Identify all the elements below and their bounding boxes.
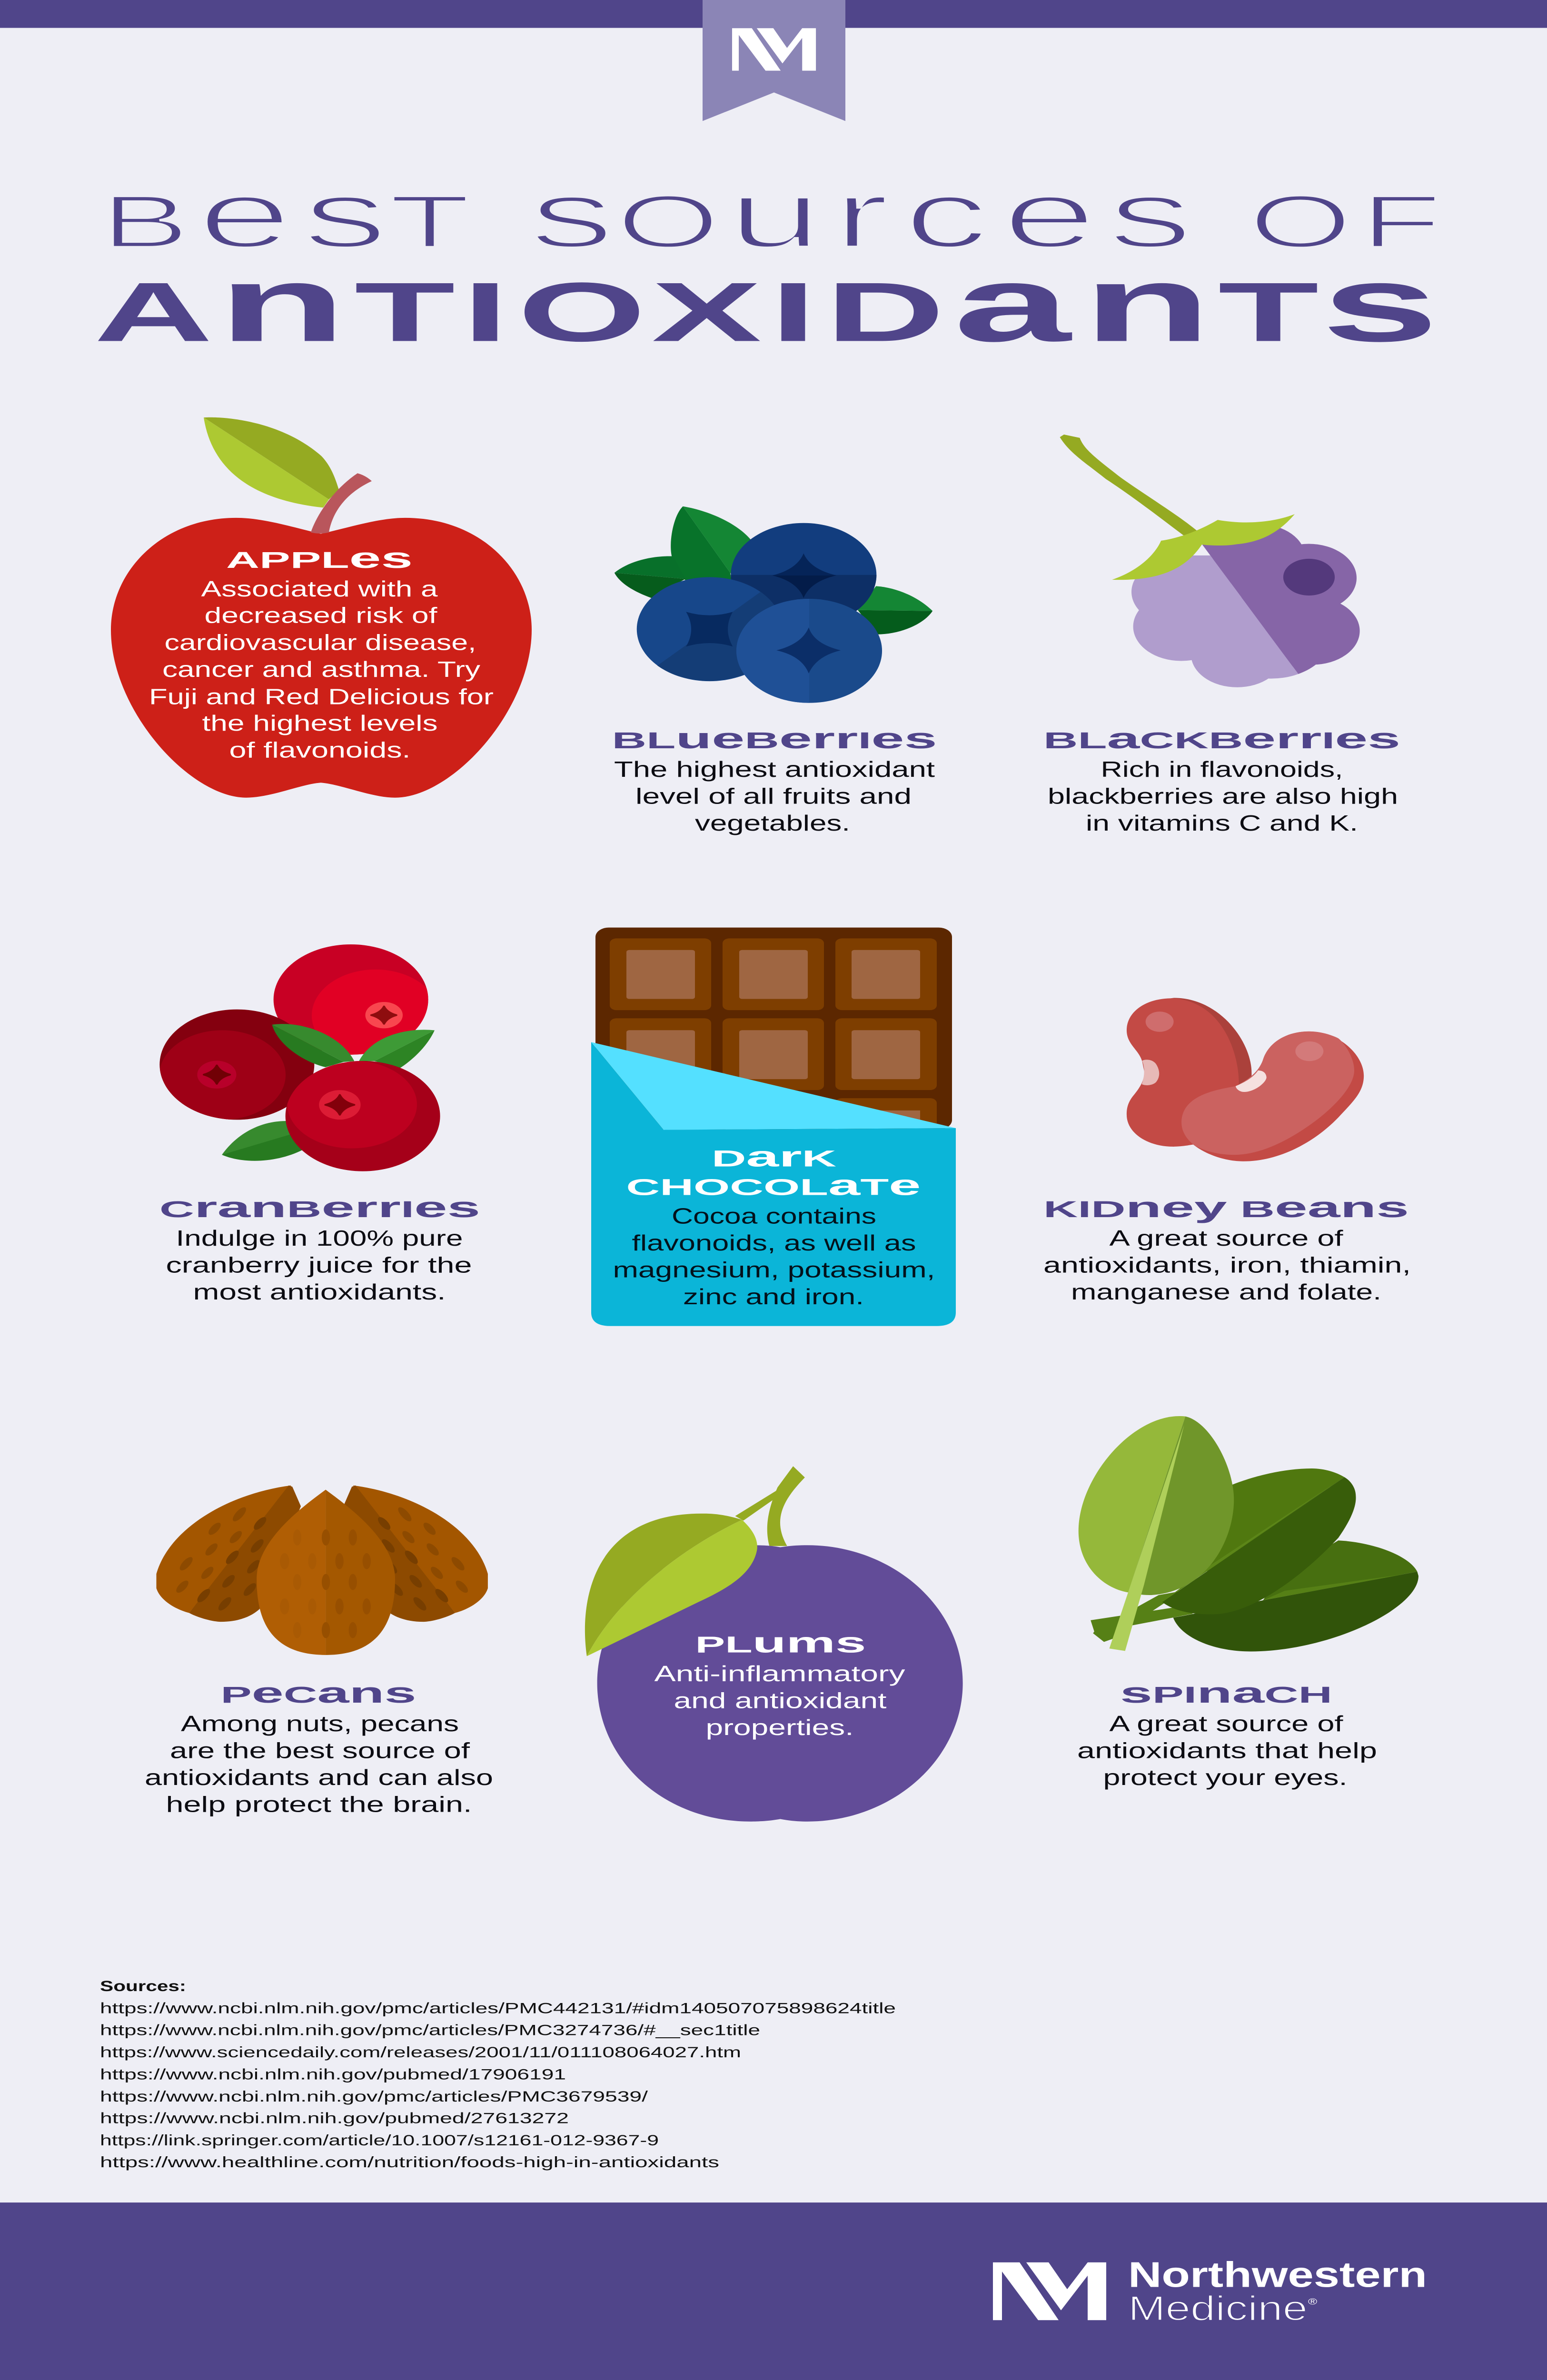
logo wordmark: Medicine bbox=[1128, 2289, 1308, 2328]
text: kidney beans bbox=[1043, 1226, 1411, 1304]
text: blueberries bbox=[614, 757, 935, 835]
text: apples: Associated with a bbox=[201, 576, 438, 601]
text: plums: and antioxidant bbox=[674, 1688, 887, 1713]
heading: cranberries: C ran B err Ies bbox=[159, 1192, 480, 1223]
heading: dark chocolate: CHOCOL a Te bbox=[626, 1170, 921, 1201]
text: apples: Fuji and Red Delicious for bbox=[149, 684, 494, 709]
text: blueberries: The highest antioxidant bbox=[614, 757, 935, 782]
heading: blackberries: BL a CKB err Ies bbox=[1043, 723, 1400, 754]
sources list: https://link.springer.com/article/10.1007/s12161-012-9367-9 bbox=[100, 2132, 659, 2149]
icon: blueberries bbox=[615, 506, 932, 703]
text: plums: properties. bbox=[705, 1715, 853, 1740]
icon: blackberry bbox=[1060, 435, 1360, 687]
sources list: https://www.ncbi.nlm.nih.gov/pmc/articles/PMC3679539/ bbox=[100, 2088, 648, 2105]
sources list: https://www.ncbi.nlm.nih.gov/pmc/articles/PMC3274736/#__sec1title bbox=[100, 2022, 760, 2039]
heading: plums: PL ums bbox=[695, 1627, 866, 1659]
icon: plum bbox=[585, 1466, 963, 1822]
text: kidney beans: A great source of bbox=[1109, 1226, 1343, 1250]
panel: pecans bbox=[145, 1486, 493, 1816]
text: blackberries: Rich in flavonoids, bbox=[1101, 757, 1343, 782]
text: pecans: Among nuts, pecans bbox=[181, 1711, 459, 1736]
top bar bbox=[0, 0, 1547, 28]
text: dark chocolate: zinc and iron. bbox=[683, 1284, 864, 1309]
sources list: https://www.sciencedaily.com/releases/2001/11/011108064027.htm bbox=[100, 2044, 741, 2061]
logo wordmark: Northwestern bbox=[1128, 2255, 1427, 2295]
icon: spinach bbox=[1079, 1416, 1418, 1651]
title bbox=[94, 161, 1442, 364]
text: kidney beans: antioxidants, iron, thiamin, bbox=[1043, 1253, 1411, 1277]
text: cranberries bbox=[166, 1226, 472, 1304]
text: spinach: protect your eyes. bbox=[1103, 1765, 1347, 1790]
text: apples: decreased risk of bbox=[205, 603, 437, 627]
sources list: https://www.ncbi.nlm.nih.gov/pubmed/27613272 bbox=[100, 2110, 569, 2127]
text: blackberries: in vitamins C and K. bbox=[1086, 811, 1358, 835]
title: BesT sOurces OF bbox=[101, 161, 1442, 268]
text: apples: cancer and asthma. Try bbox=[162, 657, 481, 682]
text: pecans: antioxidants and can also bbox=[145, 1765, 493, 1790]
text: kidney beans: manganese and folate. bbox=[1071, 1279, 1381, 1304]
heading: kidney beans: KID ney B e ans bbox=[1043, 1192, 1409, 1223]
logo wordmark bbox=[1128, 2255, 1427, 2328]
text: plums: Anti-inflammatory bbox=[654, 1661, 905, 1686]
logo mark bbox=[993, 2262, 1106, 2320]
text: blackberries: blackberries are also high bbox=[1048, 784, 1398, 808]
text: plums bbox=[654, 1661, 905, 1740]
sources list: https://www.ncbi.nlm.nih.gov/pmc/articles/PMC442131/#idm140507075898624title bbox=[100, 2000, 896, 2017]
text: spinach: antioxidants that help bbox=[1077, 1738, 1377, 1763]
heading: pecans: Pe C ans bbox=[220, 1677, 416, 1709]
icon: chocolate bar bbox=[591, 928, 956, 1326]
icon: apple bbox=[111, 417, 532, 798]
panel: blackberries bbox=[1043, 435, 1400, 835]
panel: cranberries bbox=[159, 944, 480, 1304]
text: apples: the highest levels bbox=[202, 711, 437, 735]
bookmark ribbon with logo bbox=[703, 0, 845, 121]
logo wordmark: ® bbox=[1308, 2297, 1318, 2307]
text: pecans: help protect the brain. bbox=[166, 1792, 472, 1816]
panel: dark chocolate bbox=[591, 928, 956, 1326]
panel: kidney beans bbox=[1043, 998, 1411, 1304]
panel: apples bbox=[111, 417, 532, 798]
text: dark chocolate: Cocoa contains bbox=[672, 1204, 876, 1229]
text: spinach bbox=[1077, 1711, 1377, 1790]
panel: blueberries bbox=[612, 506, 937, 835]
heading: dark chocolate bbox=[626, 1141, 921, 1201]
text: dark chocolate: magnesium, potassium, bbox=[613, 1258, 935, 1282]
text: apples bbox=[149, 576, 494, 762]
text: blueberries: vegetables. bbox=[695, 811, 850, 835]
sources list: https://www.ncbi.nlm.nih.gov/pubmed/17906191 bbox=[100, 2066, 566, 2083]
text: cranberries: Indulge in 100% pure bbox=[176, 1226, 463, 1250]
panel: plums bbox=[585, 1466, 963, 1822]
text: pecans: are the best source of bbox=[170, 1738, 470, 1763]
text: spinach: A great source of bbox=[1109, 1711, 1343, 1736]
text: apples: cardiovascular disease, bbox=[164, 630, 476, 655]
heading: dark chocolate: D ar K bbox=[712, 1141, 837, 1173]
text: cranberries: most antioxidants. bbox=[193, 1279, 446, 1304]
icon: cranberries bbox=[159, 944, 440, 1171]
icon: kidney beans bbox=[1127, 998, 1364, 1161]
sources list: Sources: bbox=[100, 1978, 186, 1994]
sources list bbox=[100, 1978, 896, 2171]
icon: pecans bbox=[156, 1486, 488, 1655]
text: dark chocolate: flavonoids, as well as bbox=[632, 1230, 916, 1255]
text: dark chocolate bbox=[613, 1204, 935, 1309]
panel: spinach bbox=[1077, 1416, 1418, 1790]
text: blueberries: level of all fruits and bbox=[635, 784, 912, 808]
title: AnTIOXIDanTs bbox=[94, 244, 1438, 364]
footer band bbox=[0, 2202, 1547, 2380]
sources list: https://www.healthline.com/nutrition/foods-high-in-antioxidants bbox=[100, 2154, 719, 2171]
heading: blueberries: BL ue B err Ies bbox=[612, 723, 937, 754]
heading: spinach: s PI na CH bbox=[1120, 1677, 1332, 1709]
text: pecans bbox=[145, 1711, 493, 1816]
text: cranberries: cranberry juice for the bbox=[166, 1253, 472, 1277]
text: blackberries bbox=[1048, 757, 1398, 835]
text: apples: of flavonoids. bbox=[229, 738, 410, 762]
heading: apples: APPL es bbox=[226, 542, 413, 574]
